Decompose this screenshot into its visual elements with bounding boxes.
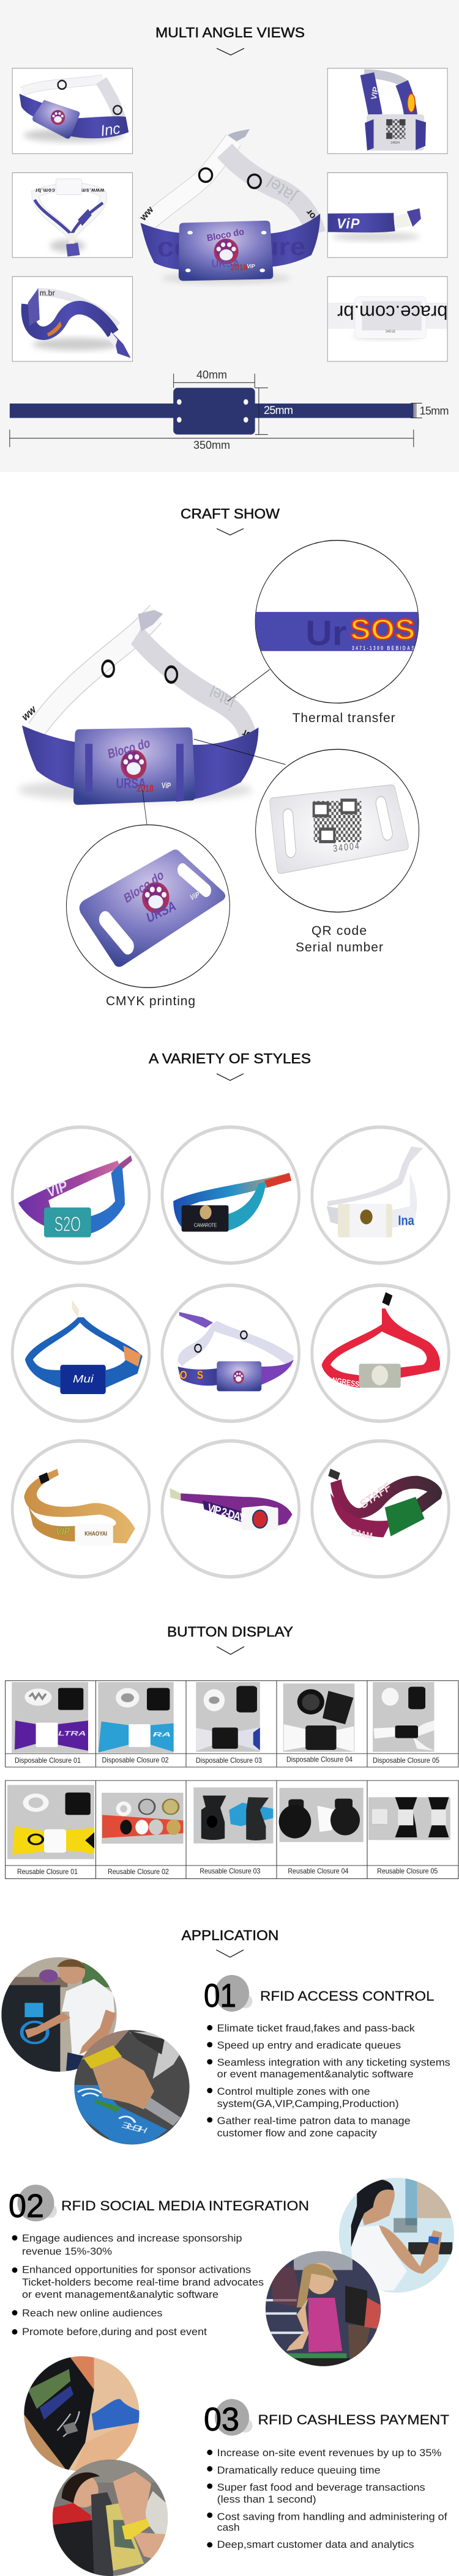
section 01 heading <box>204 1975 435 2014</box>
photo: centre wristband: ViP <box>247 263 255 269</box>
style 9: maroon staff band: STAFF <box>359 1480 393 1512</box>
callout lines <box>143 670 286 824</box>
craft show diagram <box>18 541 423 987</box>
style 2: tropical band: CAMAROTE <box>194 1222 217 1228</box>
list: access control benefits: system(GA,VIP,Camping,Production) <box>217 2098 399 2109</box>
wristband: ww <box>20 702 38 724</box>
photo: reusable closure 02 <box>102 1793 184 1843</box>
closure captions <box>15 1755 439 1876</box>
style 7: gold band: KHAOYAI <box>84 1530 107 1537</box>
section 03 heading <box>204 2399 449 2438</box>
label: QR code: QR code <box>312 924 367 938</box>
callout circle: thermal transfer: SOS <box>350 613 416 646</box>
wristband: .or <box>241 726 255 745</box>
photo: hand tapping wristband: HERE <box>120 2120 149 2135</box>
photo: reusable closure 01 <box>7 1785 94 1859</box>
photo: centre wristband: ww <box>138 204 156 223</box>
callout circle: thermal transfer: 3471-1300 BEBIDAS <box>352 645 414 651</box>
list: cashless payment benefits: Increase on-site event revenues by up to 35% <box>217 2447 441 2459</box>
photo: reusable closure 03 <box>193 1787 273 1843</box>
callout circle: thermal transfer <box>253 541 423 703</box>
photo: bottom left view <box>12 276 132 361</box>
photo: bottom right view <box>327 276 448 361</box>
list: social media benefits: revenue 15%-30% <box>22 2246 112 2257</box>
photo: man at access gate <box>0 1957 118 2073</box>
list: social media benefits: Engage audiences and increase sponsorship <box>22 2232 242 2244</box>
closure captions: Reusable Closure 02 <box>108 1867 169 1876</box>
photo: disposable closure 02: RA <box>153 1731 171 1738</box>
photo: centre wristband: URSA <box>212 258 240 270</box>
panel: multi angle views background <box>0 0 459 472</box>
label: 15mm: 15mm <box>420 405 449 417</box>
photo: middle left view: www.smartbrace.com.br <box>35 188 105 194</box>
photo: disposable closure 04 <box>283 1683 354 1752</box>
photo: centre wristband <box>138 129 320 284</box>
list: social media benefits: or event management&analytic software <box>22 2289 218 2300</box>
list: social media benefits: Reach new online audiences <box>22 2307 163 2319</box>
style 1: S2O purple band <box>12 1127 149 1263</box>
style 1: S2O purple band: VIP <box>45 1177 69 1201</box>
photo: disposable closure 05 <box>373 1682 434 1752</box>
label: 40mm: 40mm <box>196 369 227 381</box>
style 6: red band: NGRESS <box>332 1376 360 1389</box>
badge <box>239 2419 252 2432</box>
style 7: gold band <box>12 1441 149 1577</box>
label: 25mm: 25mm <box>264 404 293 416</box>
list: cashless payment benefits: Dramatically reduce queuing time <box>217 2465 381 2476</box>
wristband: ViP <box>162 782 171 790</box>
photo: woman in pink at bar <box>264 2251 382 2368</box>
style 1: S2O purple band: S2O <box>54 1212 81 1236</box>
style 8: purple VIP 2-day band <box>162 1441 299 1577</box>
list: cashless payment benefits: Super fast food and beverage transactions <box>217 2482 425 2493</box>
application photos: access control <box>0 1957 191 2145</box>
photo: disposable closure 03 <box>196 1682 260 1752</box>
photo: middle left view <box>12 172 132 257</box>
list: access control benefits: Control multiple zones with one <box>217 2086 370 2097</box>
list: access control benefits <box>207 2023 450 2139</box>
style 5: purple SOS band: OS <box>180 1369 203 1382</box>
section 02 heading <box>9 2185 309 2224</box>
label: serial number: Serial number <box>296 940 383 954</box>
callout circle: QR code plate: 34004 <box>333 840 359 854</box>
style 7: gold band: VIP <box>56 1526 70 1538</box>
icon: chevron <box>217 1074 244 1080</box>
photo: blue silicone band at reader <box>23 2356 147 2471</box>
closure photos <box>7 1682 450 1859</box>
callout circle: QR code plate <box>256 749 419 912</box>
section 01 heading: 01 <box>204 1977 236 2014</box>
photo: centre wristband: ce <box>157 232 191 263</box>
photo: top right view <box>327 68 447 153</box>
style 4: blue island band <box>12 1285 149 1421</box>
closure captions: Disposable Closure 05 <box>373 1756 439 1765</box>
list: social media benefits: Ticket-holders become real-time brand advocates <box>22 2276 264 2288</box>
photo: centre wristband: .or <box>304 207 319 223</box>
label: CMYK printing: CMYK printing <box>106 994 195 1008</box>
closure captions: Disposable Closure 01 <box>15 1756 81 1765</box>
list: social media benefits: Promote before,during and post event <box>22 2326 207 2338</box>
closure captions: Disposable Closure 03 <box>196 1756 262 1765</box>
photo: bottom left view: m.br <box>40 288 55 298</box>
photo: cashier and raised fist <box>51 2459 169 2576</box>
photo: top left view: Inc <box>100 120 121 140</box>
title: multi angle views: MULTI ANGLE VIEWS <box>155 24 305 40</box>
style 9: maroon staff band <box>312 1441 449 1577</box>
list: access control benefits: Gather real-time patron data to manage <box>217 2115 411 2127</box>
style 2: tropical band <box>162 1127 299 1263</box>
badge <box>239 1995 252 2008</box>
photo: reusable closure 04 <box>279 1788 364 1842</box>
closure table: rows and columns <box>6 1681 458 1879</box>
photo: middle right view <box>327 172 447 257</box>
list: access control benefits: Speed up entry and eradicate queues <box>217 2040 401 2051</box>
style 6: red band <box>312 1285 449 1421</box>
icon: chevron <box>216 1950 244 1957</box>
wristband <box>18 610 258 805</box>
icon: chevron <box>217 528 244 535</box>
photo: disposable closure 01 <box>12 1682 88 1753</box>
closure captions: Disposable Closure 04 <box>286 1755 353 1764</box>
closure captions: Disposable Closure 02 <box>102 1756 169 1765</box>
photo: centre wristband: ure <box>261 233 305 260</box>
wristband: Bloco do <box>107 736 151 762</box>
section 01 heading: RFID ACCESS CONTROL <box>260 1988 435 2004</box>
list: cashless payment benefits: Cost saving from handling and administering of <box>217 2511 447 2522</box>
list: access control benefits: or event management&analytic software <box>217 2069 414 2080</box>
photo: woman with wristband <box>338 2177 455 2293</box>
closure captions: Reusable Closure 05 <box>377 1867 438 1875</box>
photo: top right view: VIP <box>369 86 380 100</box>
photo: top right view: 34004 <box>390 141 400 145</box>
title: button display: BUTTON DISPLAY <box>167 1624 293 1640</box>
photo: bottom right view: brace.com.br <box>337 301 448 323</box>
list: social media benefits: Enhanced opportunities for sponsor activations <box>22 2264 251 2276</box>
icon: chevron <box>217 1647 244 1655</box>
closure captions: Reusable Closure 01 <box>17 1867 78 1876</box>
callout circle: thermal transfer: Ur <box>305 613 347 653</box>
photo: centre wristband: 2018 <box>231 262 248 271</box>
list: access control benefits: Seamless integration with any ticketing systems <box>217 2057 450 2069</box>
callout circle: CMYK card: Bloco do <box>122 868 165 907</box>
section 03 heading: RFID CASHLESS PAYMENT <box>258 2412 449 2427</box>
callout circle: CMYK card: URSA <box>145 898 177 926</box>
closure captions: Reusable Closure 04 <box>288 1867 349 1875</box>
photo: middle right view: ViP <box>337 216 360 232</box>
label: 350mm: 350mm <box>193 439 230 451</box>
photo: disposable closure 02 <box>98 1682 174 1753</box>
photo: disposable closure 01: LTRA <box>58 1729 86 1737</box>
style 8: purple VIP 2-day band: VIP 2-DAY <box>207 1501 247 1525</box>
list: access control benefits: customer flow and zone capacity <box>217 2127 377 2139</box>
photo: centre wristband: Bloco do <box>206 227 245 244</box>
list: cashless payment benefits: cash <box>217 2522 240 2533</box>
style 5: purple SOS band <box>162 1285 299 1421</box>
callout circle: CMYK card: ViP <box>190 890 201 902</box>
closure captions: Reusable Closure 03 <box>200 1867 261 1875</box>
badge <box>43 2204 57 2218</box>
photo: hand tapping wristband <box>73 2029 191 2145</box>
section 03 heading: 03 <box>204 2401 239 2438</box>
photo: reusable closure 05 <box>368 1797 450 1840</box>
title: craft show: CRAFT SHOW <box>181 506 280 522</box>
multi angle photos <box>10 68 448 447</box>
list: cashless payment benefits <box>207 2447 447 2550</box>
wristband: 2018 <box>136 784 154 795</box>
list: cashless payment benefits: Deep,smart customer data and analytics <box>217 2539 414 2550</box>
list: cashless payment benefits: (less than 1 second) <box>217 2493 316 2505</box>
style 3: white band with gold card <box>312 1127 449 1263</box>
callout circle: CMYK card <box>66 825 230 987</box>
icon: chevron <box>217 48 244 55</box>
label: thermal transfer: Thermal transfer <box>293 711 395 725</box>
title: a variety of styles: A VARIETY OF STYLES <box>149 1050 311 1066</box>
style 3: white band with gold card: Ina <box>398 1214 414 1228</box>
wristband: jatel <box>207 681 237 715</box>
application photos: social media and cashless <box>23 2177 455 2576</box>
list: access control benefits: Elimate ticket fraud,fakes and pass-back <box>217 2023 415 2034</box>
section 02 heading: 02 <box>9 2188 44 2224</box>
size diagram shapes <box>10 374 422 447</box>
wristband: URSA <box>116 777 146 791</box>
wristband styles grid <box>12 1127 449 1577</box>
photo: top left view <box>12 68 132 153</box>
photo: bottom right view: 34018 <box>386 330 395 334</box>
section 02 heading: RFID SOCIAL MEDIA INTEGRATION <box>61 2198 309 2213</box>
title: application: APPLICATION <box>181 1927 279 1943</box>
list: social media benefits <box>12 2232 264 2338</box>
photo: centre wristband: jatel <box>263 172 300 207</box>
style 4: blue island band: Mui <box>73 1374 94 1385</box>
style 9: maroon staff band: EJAM <box>351 1527 373 1541</box>
